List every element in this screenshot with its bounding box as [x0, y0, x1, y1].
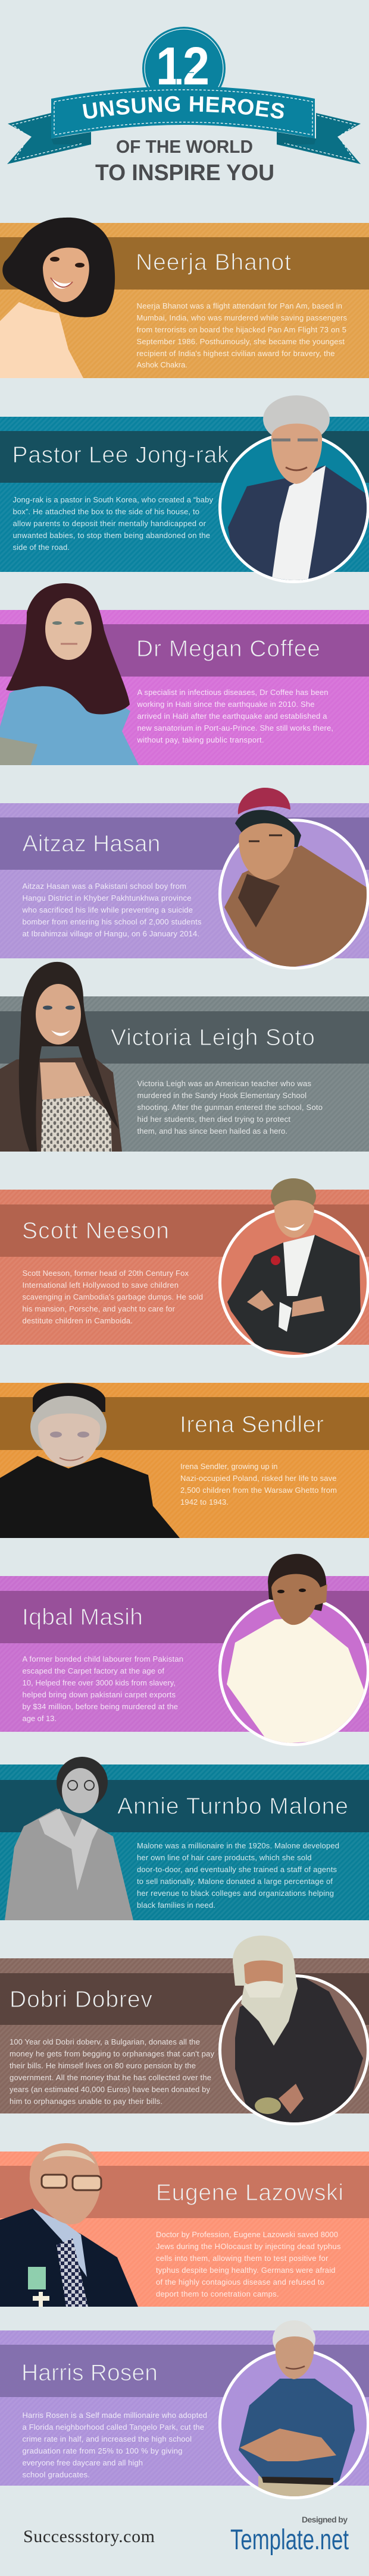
description: International left Hollywood to save children	[23, 1281, 179, 1289]
portrait	[220, 395, 369, 589]
description: Jong-rak is a pastor in South Korea, who created a “baby	[13, 495, 213, 504]
description: Doctor by Profession, Eugene Lazowski saved 8000	[156, 2230, 338, 2239]
description: A specialist in infectious diseases, Dr Coffee has been	[137, 688, 329, 697]
portrait	[220, 788, 369, 969]
description: escaped the Carpet factory at the age of	[23, 1666, 164, 1675]
subtitle: OF THE WORLD	[116, 136, 253, 157]
panel: Neerja Bhanot	[0, 218, 369, 378]
ribbon left tail	[7, 113, 91, 164]
description: Harris Rosen is a Self made millionaire who adopted	[23, 2411, 207, 2420]
panel: Dobri Dobrev	[0, 1936, 369, 2125]
description: deport them to conetration camps.	[156, 2289, 279, 2298]
description: school graducates.	[23, 2470, 90, 2479]
description: their bills. He himself lives on 80 euro pension by the	[10, 2061, 196, 2070]
description	[180, 1462, 337, 1506]
description: typhus despite being healthy. Germans were afraid	[156, 2266, 336, 2275]
name: Dobri Dobrev	[10, 1987, 152, 2012]
description	[156, 2230, 341, 2298]
description: Victoria Leigh was an American teacher who was	[137, 1079, 312, 1088]
footer: Designed by credit: Designed by	[302, 2515, 348, 2524]
name: Iqbal Masih	[22, 1605, 143, 1630]
portrait	[0, 1383, 180, 1538]
description: age of 13.	[23, 1714, 57, 1723]
description	[23, 1269, 203, 1325]
description: from terrorists on board the hijacked Pan Am Flight 73 on 5	[137, 325, 346, 334]
name: Scott Neeson	[22, 1218, 169, 1244]
description: Ashok Chakra.	[137, 360, 187, 369]
name: Annie Turnbo Malone	[117, 1794, 348, 1819]
panel: Eugene Lazowski	[0, 2143, 369, 2307]
description: A former bonded child labourer from Pakistan	[23, 1655, 183, 1663]
description: destitute children in Camboida.	[23, 1316, 133, 1325]
description	[137, 688, 333, 744]
footer: Designed by credit	[230, 2515, 349, 2556]
subtitle	[95, 136, 274, 185]
panel: Aitzaz Hasan	[0, 788, 369, 969]
ribbon main	[51, 87, 315, 139]
description: bomber from entering his school of 2,000 students	[23, 917, 202, 926]
description	[137, 1841, 339, 1910]
description: unwanted babies, to stop them being abandoned on the	[13, 531, 210, 540]
description: her revenue to black colleges and organizations helping	[137, 1889, 334, 1898]
description: Hangu District in Khyber Pakhtunkhwa province	[23, 894, 192, 902]
name: Aitzaz Hasan	[23, 831, 161, 857]
description: her own line of hair care products, which she sold	[137, 1853, 312, 1862]
description: everyone free daycare and all high	[23, 2458, 143, 2467]
description: box”. He attached the box to the side of his house, to	[13, 507, 199, 516]
description: Malone was a millionaire in the 1920s. Malone developed	[137, 1841, 339, 1850]
name: Irena Sendler	[180, 1412, 324, 1438]
description: by $34 million, before being murdered at the	[23, 1702, 178, 1711]
description: cells into them, allowing them to test positive for	[156, 2254, 329, 2263]
description: years (an estimated 40,000 Euros) have been donated by	[10, 2085, 211, 2094]
description: scavenging in Cambodia's garbage dumps. He sold	[23, 1292, 203, 1301]
name: Harris Rosen	[21, 2360, 158, 2386]
description: Aitzaz Hasan was a Pakistani school boy from	[23, 882, 186, 891]
name: Pastor Lee Jong-rak	[12, 442, 229, 468]
number 12: 12	[156, 37, 209, 96]
description: Nazi-occupied Poland, risked her life to save	[180, 1474, 337, 1483]
description: working in Haiti since the earthquake in 2010. She	[137, 700, 314, 709]
description: him to orphanages unable to pay their bills.	[10, 2097, 162, 2106]
description	[21, 882, 202, 938]
panel: Dr Megan Coffee	[0, 583, 369, 765]
name: Dr Megan Coffee	[136, 636, 320, 662]
portrait	[220, 1554, 368, 1745]
description: 1942 to 1943.	[180, 1498, 229, 1506]
portrait	[220, 2320, 368, 2500]
ribbon right tail	[277, 113, 361, 164]
portrait	[0, 962, 122, 1152]
description	[23, 1655, 183, 1723]
description: Jews during the HOlocaust by injecting dead typhus	[156, 2242, 341, 2251]
portrait	[5, 1757, 133, 1920]
description	[10, 2037, 214, 2106]
portrait	[0, 218, 115, 378]
description: shooting. After the gunman entered the school, Soto	[137, 1103, 323, 1112]
name: Eugene Lazowski	[156, 2180, 343, 2206]
description: 2,500 children from the Warsaw Ghetto from	[180, 1486, 337, 1495]
description: door-to-door, and eventually she trained a staff of agents	[137, 1865, 337, 1874]
name: Neerja Bhanot	[136, 250, 291, 275]
description: at Ibrahimzai village of Hangu, on 6 January 2014.	[23, 929, 199, 938]
panel: Iqbal Masih	[0, 1554, 369, 1745]
description: hid her students, then died trying to protect	[137, 1115, 290, 1124]
description: Mumbai, India, who was murdered while saving passengers	[137, 313, 348, 322]
description	[137, 1079, 323, 1136]
description: to sell nationally. Malone donated a large percentage of	[137, 1877, 333, 1886]
panel: Annie Turnbo Malone	[0, 1757, 369, 1920]
description: money he gets from begging to orphanages that can't pay	[10, 2049, 214, 2058]
title banner	[7, 27, 361, 185]
description: 10, Helped free over 3000 kids from slavery,	[23, 1678, 176, 1687]
description: allow parents to deposit their mentally handicapped or	[13, 519, 207, 528]
subtitle: TO INSPIRE YOU	[95, 161, 274, 185]
description: of the highly contagious disease and refused to	[156, 2278, 324, 2286]
description: a Florida neighborhood called Tangelo Park, cut the	[23, 2423, 204, 2432]
panel: Irena Sendler	[0, 1383, 369, 1538]
portrait	[0, 2143, 138, 2307]
description	[13, 495, 213, 552]
panel: Pastor Lee Jong-rak	[0, 395, 369, 589]
panel: Victoria Leigh Soto	[0, 962, 369, 1152]
description: 100 Year old Dobri doberv, a Bulgarian, donates all the	[10, 2037, 200, 2046]
description: Neerja Bhanot was a flight attendant for Pan Am, based in	[137, 301, 342, 310]
description: murdered in the Sandy Hook Elementary School	[137, 1091, 307, 1100]
description: them, and has since been hailed as a hero.	[137, 1127, 287, 1136]
description: without pay, taking public transport.	[137, 735, 264, 744]
ribbon main: UNSUNG HEROES	[82, 96, 284, 119]
description: crime rate in half, and increased the high school	[23, 2435, 192, 2443]
description: helped bring down pakistani carpet exports	[23, 1690, 176, 1699]
portrait	[220, 1178, 368, 1357]
description: who sacrificed his life while preventing a suicide	[21, 905, 193, 914]
description: his mansion, Porsche, and yacht to care for	[23, 1304, 176, 1313]
footer: Successstory.com: Successstory.com	[23, 2527, 155, 2546]
badge circle behind number	[142, 27, 226, 110]
name: Victoria Leigh Soto	[111, 1025, 315, 1050]
description: graduation rate from 25% to 100 % by giving	[23, 2446, 182, 2455]
panel: Scott Neeson	[0, 1178, 369, 1357]
description: Irena Sendler, growing up in	[180, 1462, 277, 1471]
description: black families in need.	[137, 1901, 215, 1910]
description	[137, 301, 348, 369]
portrait	[220, 1936, 368, 2125]
portrait	[0, 583, 139, 765]
description: new sanatorium in Port-au-Prince. She still works there,	[137, 724, 333, 732]
panel: Harris Rosen	[0, 2320, 369, 2500]
description: side of the road.	[13, 543, 70, 552]
description: recipient of India's highest civilian award for bravery, the	[137, 349, 334, 358]
description: arrived in Haiti after the earthquake and established a	[137, 712, 327, 721]
description: government. All the money that he has collected over the	[10, 2073, 211, 2082]
description	[23, 2411, 207, 2479]
description: Scott Neeson, former head of 20th Century Fox	[23, 1269, 189, 1278]
description: September 1986. Posthumously, she became the youngest	[137, 337, 345, 346]
